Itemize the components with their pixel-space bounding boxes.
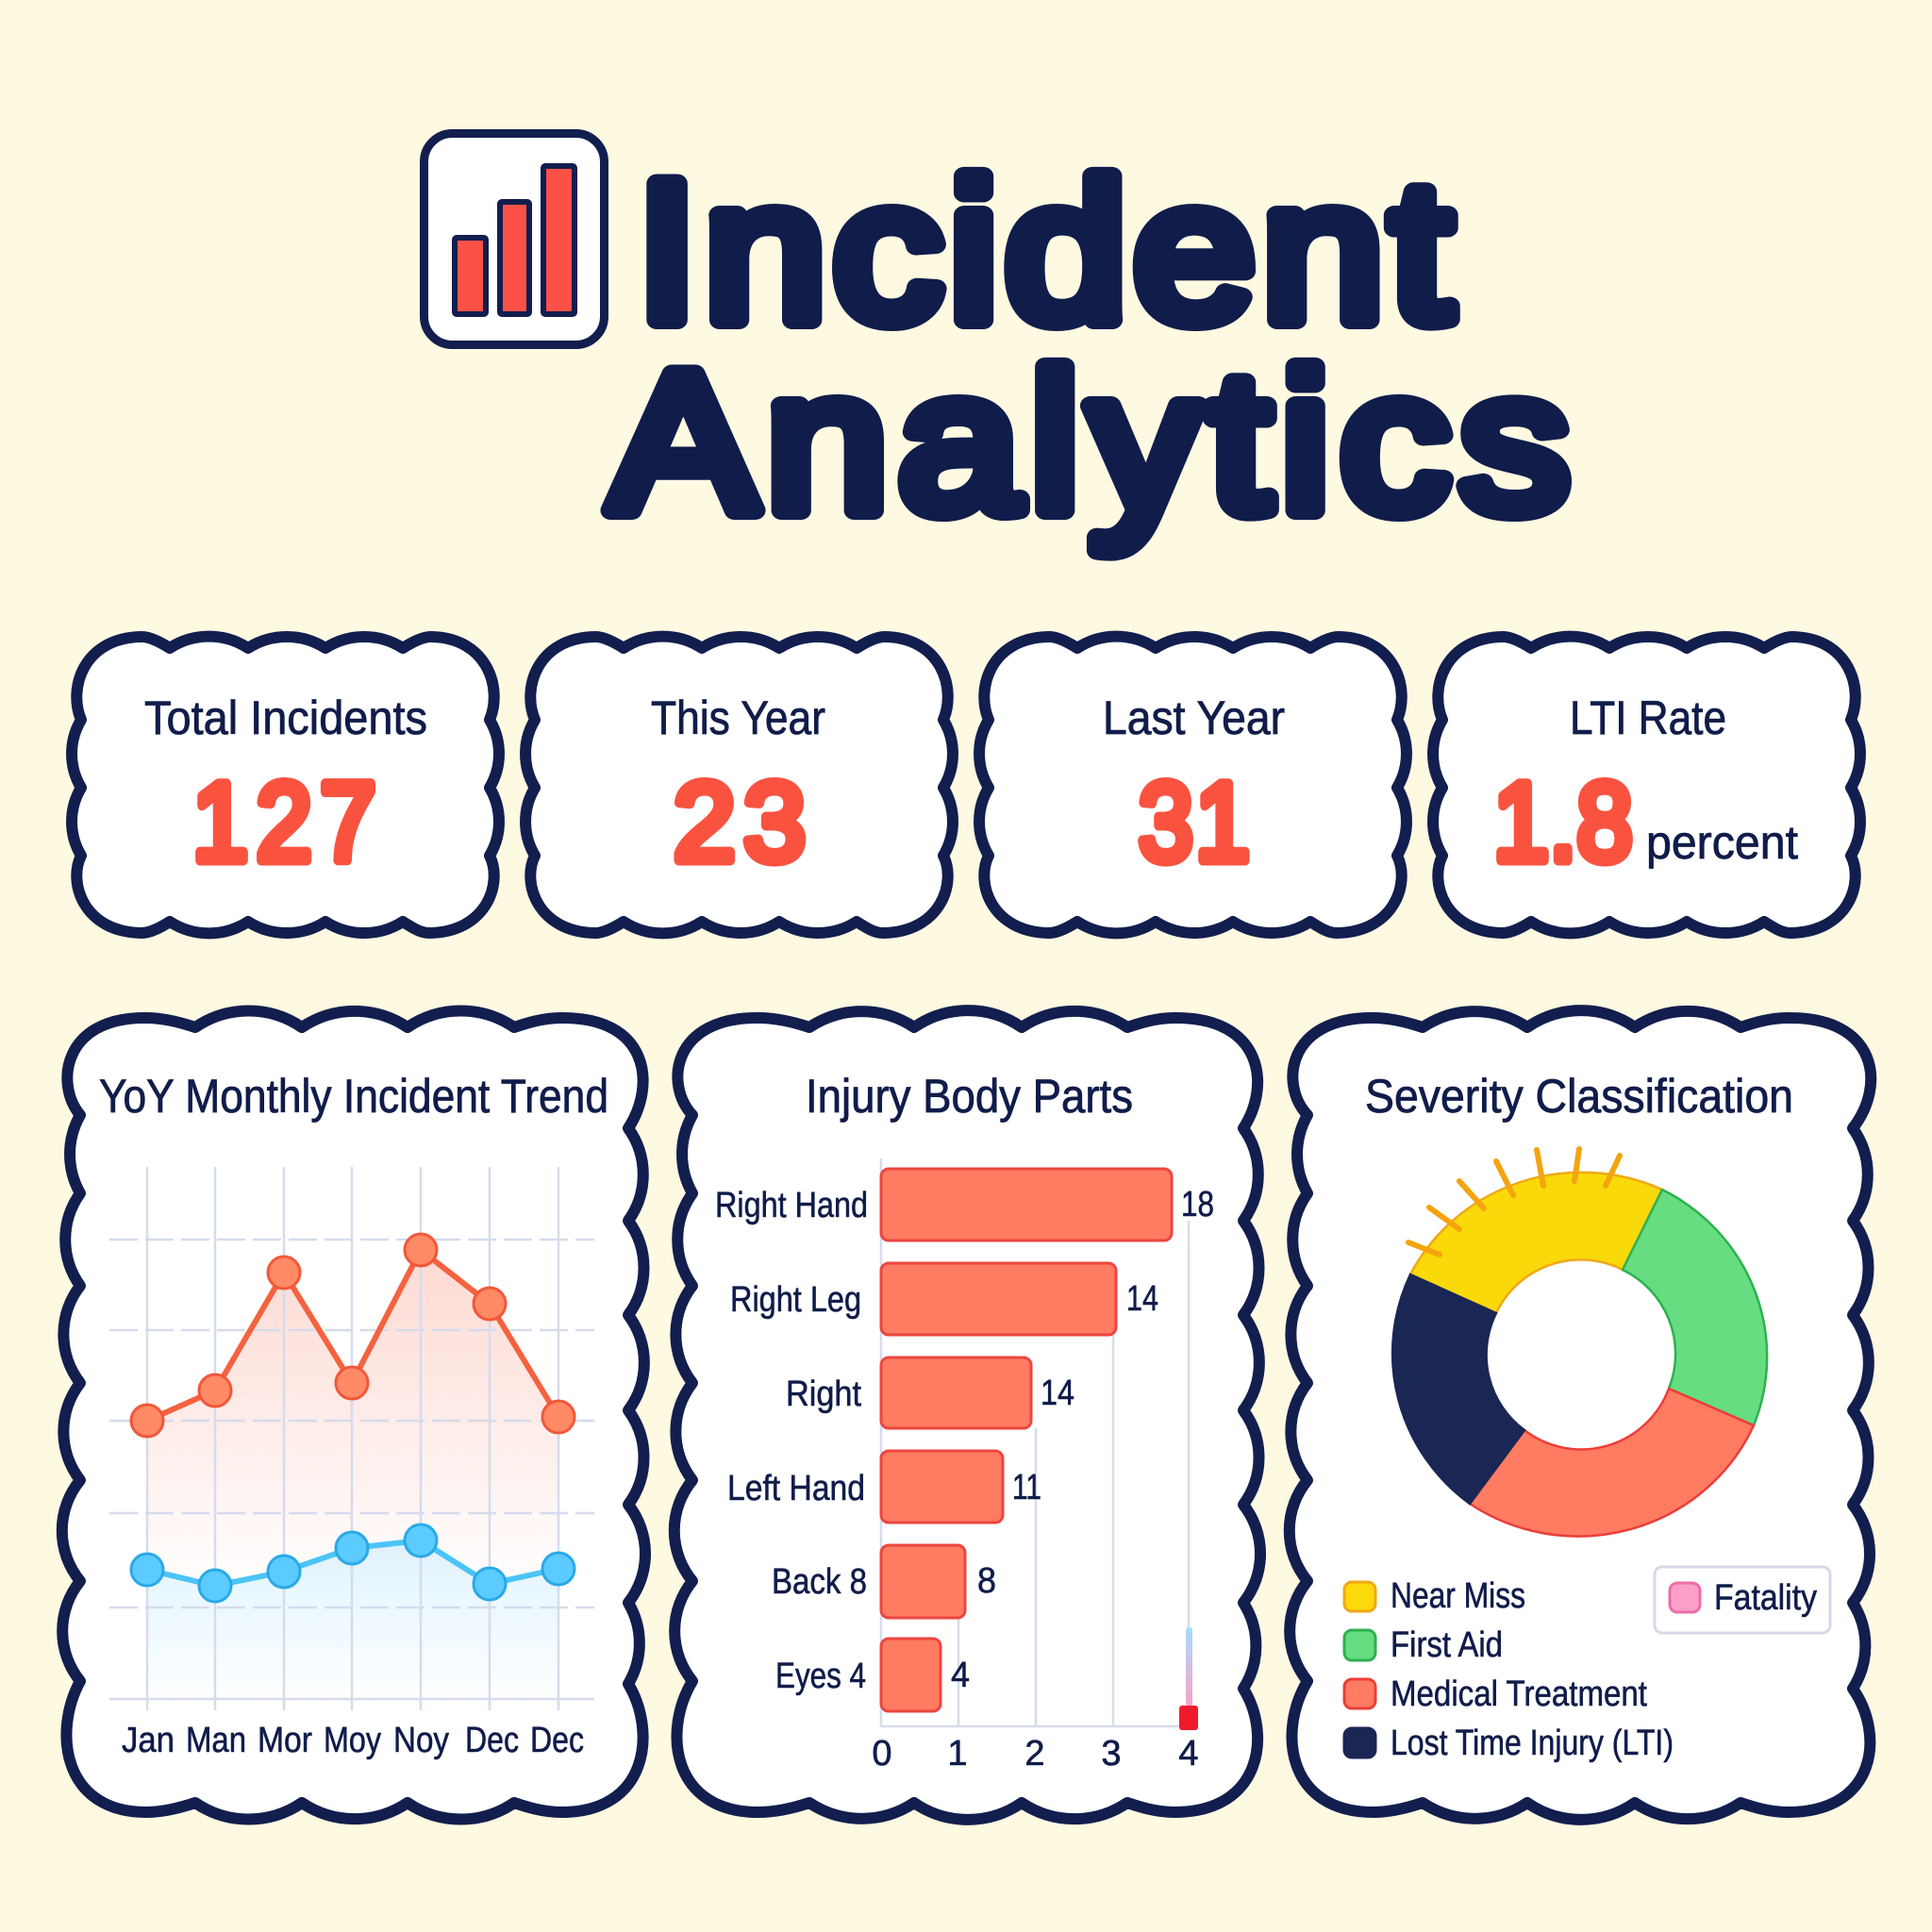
area: last year (147, 1541, 558, 1699)
axis ticks: 4 (1178, 1734, 1199, 1774)
category labels: Left Hand (727, 1469, 865, 1508)
value labels: 4 (951, 1656, 970, 1695)
panel: injury body parts (675, 1010, 1260, 1820)
segment: first aid (1623, 1190, 1767, 1425)
KPI card: Total Incidents (72, 637, 499, 933)
value labels: 11 (1012, 1468, 1041, 1507)
label: This Year (651, 691, 825, 744)
month labels: Jan (122, 1721, 175, 1760)
panel: YoY monthly incident trend (62, 1011, 645, 1819)
thermometer marker (1179, 1627, 1198, 1730)
value labels: 8 (977, 1561, 996, 1601)
month labels: Man (186, 1721, 246, 1760)
category labels: Right Leg (730, 1280, 861, 1320)
legend: Near Miss (1391, 1576, 1525, 1616)
category labels: Right (786, 1374, 861, 1414)
category labels: Back 8 (772, 1562, 867, 1602)
line chart (109, 1167, 594, 1760)
legend callout: fatality (1655, 1567, 1830, 1633)
heading: YoY Monthly Incident Trend (99, 1070, 608, 1123)
axis ticks: 0 (872, 1734, 892, 1774)
bar chart (715, 1158, 1214, 1774)
tick marks (1408, 1149, 1620, 1255)
category labels (715, 1186, 868, 1696)
value labels: 14 (1126, 1279, 1158, 1319)
month labels: Noy (393, 1721, 449, 1760)
axis ticks: 1 (947, 1734, 968, 1774)
heading: Injury Body Parts (806, 1070, 1133, 1123)
month labels: Dec (465, 1721, 519, 1760)
label: Total Incidents (144, 691, 427, 744)
axis ticks (872, 1734, 1199, 1774)
bars (881, 1169, 1172, 1711)
series: red line (131, 1234, 575, 1437)
legend (1344, 1576, 1674, 1763)
legend: First Aid (1391, 1625, 1503, 1665)
axis ticks: 3 (1101, 1734, 1122, 1774)
month labels (122, 1721, 584, 1760)
heading: Severity Classification (1365, 1070, 1793, 1123)
segment: near miss (1410, 1173, 1662, 1313)
label: LTI Rate (1570, 691, 1726, 744)
category labels: Eyes 4 (775, 1657, 866, 1696)
category labels: Right Hand (715, 1186, 868, 1225)
value labels (951, 1185, 1214, 1695)
title block (425, 134, 1569, 553)
value: 23 (674, 760, 806, 885)
value labels: 14 (1041, 1374, 1074, 1413)
series: blue line (131, 1524, 575, 1602)
axis ticks: 2 (1024, 1734, 1045, 1774)
month labels: Mor (258, 1721, 312, 1760)
label: Last Year (1103, 691, 1285, 744)
value: 127 (192, 759, 375, 884)
segment: lost time injury (1392, 1274, 1524, 1504)
value: 1.8 (1493, 759, 1633, 884)
segment: medical treatment (1470, 1389, 1754, 1537)
panel: severity classification (1290, 1010, 1871, 1820)
value labels: 18 (1181, 1185, 1214, 1224)
month labels: Dec (530, 1721, 584, 1760)
donut chart (1392, 1149, 1767, 1537)
area: this year (147, 1250, 558, 1594)
heading: Incident: Incident (637, 141, 1451, 362)
legend callout: fatality: Fatality (1714, 1578, 1817, 1618)
value: 31 (1139, 759, 1250, 884)
KPI card: LTI Rate (1433, 637, 1860, 933)
KPI card: Last Year (979, 637, 1407, 933)
unit: percent (1646, 816, 1798, 869)
icon: bar chart (425, 134, 604, 345)
legend: Lost Time Injury (LTI) (1391, 1724, 1674, 1763)
month labels: Moy (324, 1721, 381, 1760)
legend: Medical Treatment (1391, 1674, 1647, 1714)
heading: Analytics: Analytics (610, 331, 1569, 553)
KPI card: This Year (525, 637, 953, 933)
